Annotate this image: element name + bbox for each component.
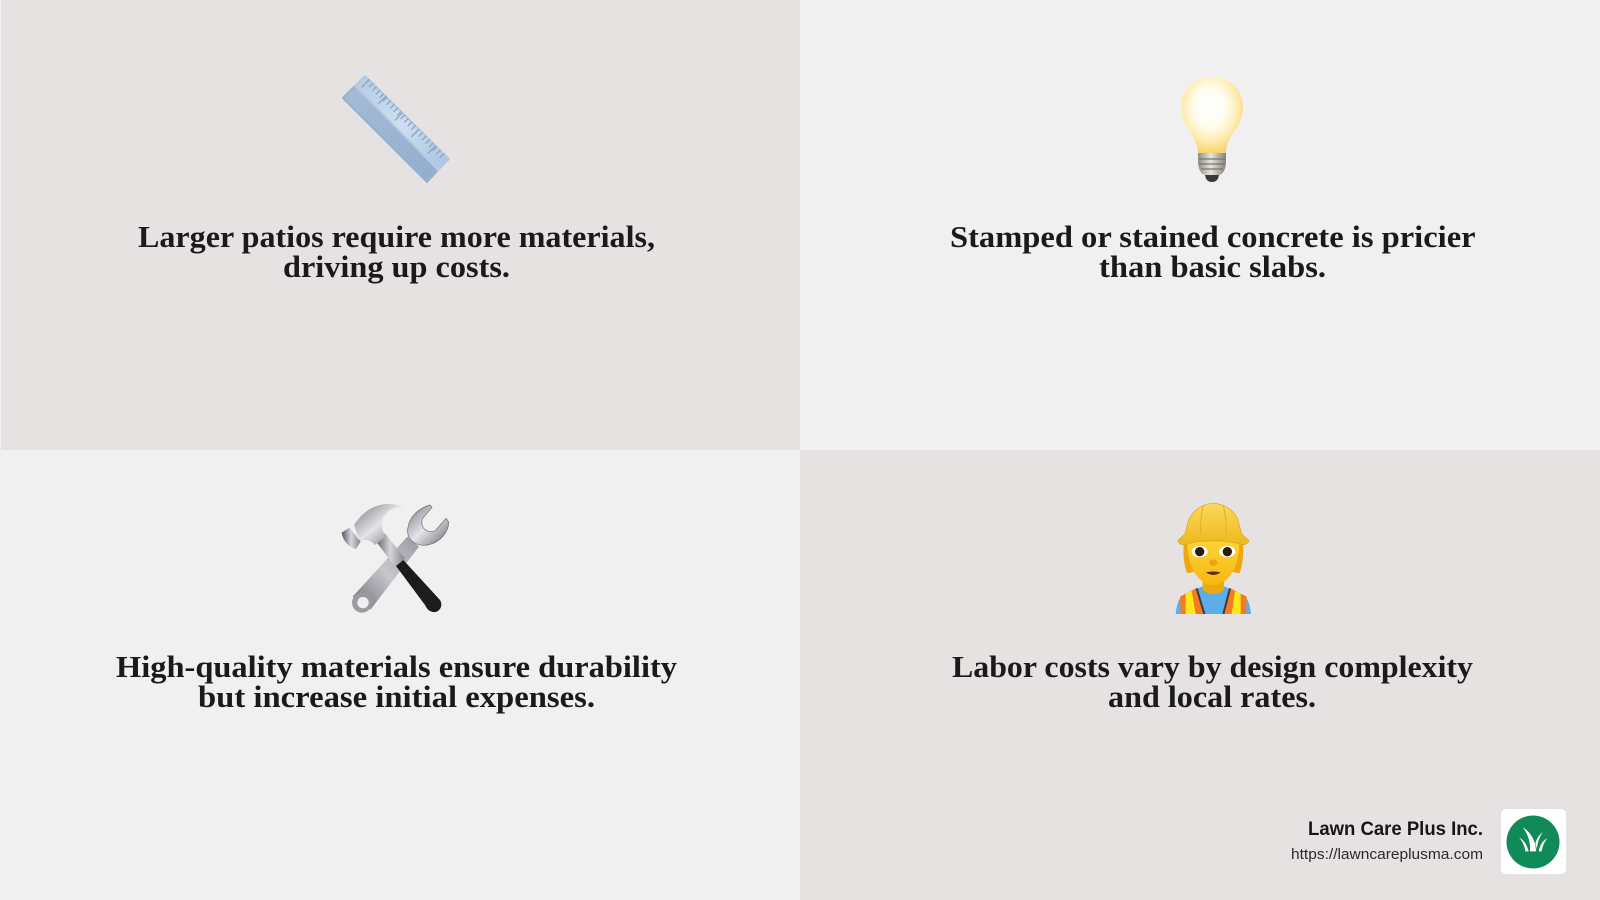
company branding [1291, 809, 1566, 874]
icon: light bulb [1181, 77, 1243, 182]
heading: high-quality materials: High-quality materials ensure durability [116, 649, 678, 684]
heading: larger patios: driving up costs. [283, 249, 510, 284]
heading: labor costs: and local rates. [1108, 679, 1316, 714]
panel: labor [800, 450, 1600, 900]
icon: hammer and wrench [342, 504, 449, 613]
company name: Lawn Care Plus Inc. [1308, 819, 1483, 840]
heading: labor costs: Labor costs vary by design complexity [952, 649, 1473, 684]
panel: materials [0, 450, 800, 900]
heading: larger patios: Larger patios require more materials, [138, 219, 655, 254]
logo [1501, 809, 1566, 874]
heading: stamped concrete: Stamped or stained concrete is pricier [950, 219, 1476, 254]
company url: https://lawncareplusma.com [1291, 846, 1483, 863]
icon: construction worker [1176, 503, 1251, 614]
panel: project size [0, 0, 800, 450]
heading: stamped concrete: than basic slabs. [1099, 249, 1326, 284]
panel: design finish [800, 0, 1600, 450]
icon: ruler [343, 76, 449, 182]
heading: high-quality materials: but increase initial expenses. [198, 679, 595, 714]
